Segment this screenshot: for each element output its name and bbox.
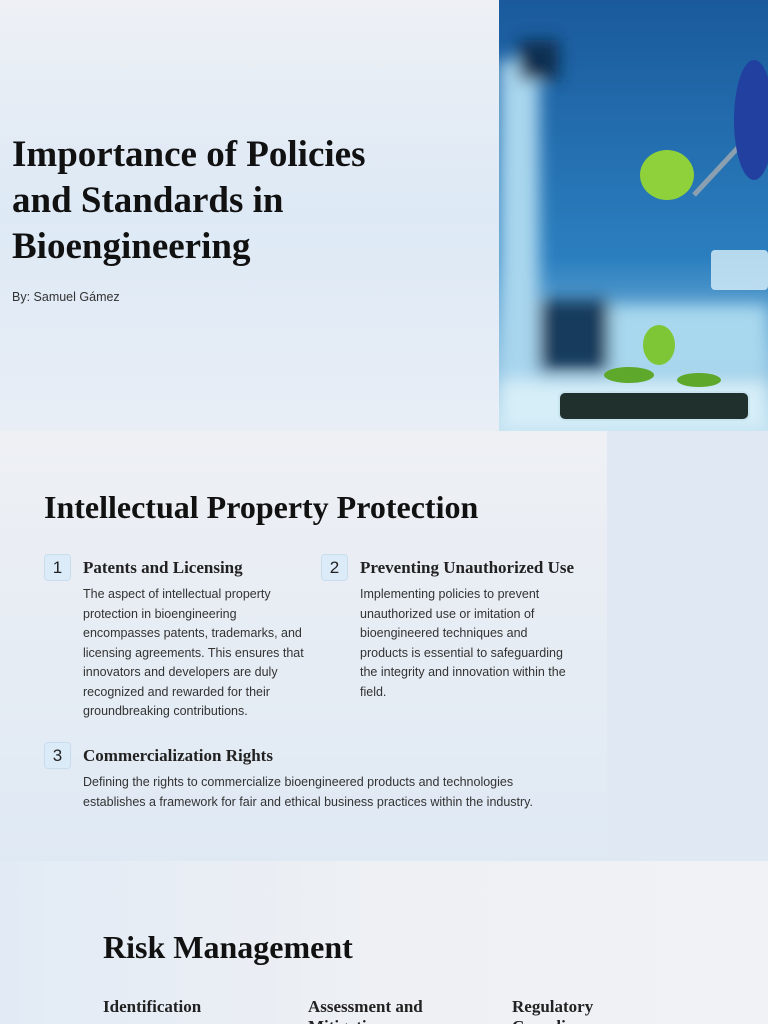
- item 1: The aspect of intellectual property protection in bioengineering encompasses patents, trademarks, and licensing agreements. This ensures that innovators and developers are duly recognized and rewarded for their groundbreaking contributions.: [83, 587, 304, 718]
- title: Importance of Policies and Standards in Bioengineering: [12, 134, 365, 267]
- photo: lab plant: [499, 0, 768, 431]
- item 1: Patents and Licensing: [83, 558, 243, 577]
- section: title: [0, 0, 768, 431]
- section: intellectual property: [0, 431, 768, 861]
- item 2: 2: [330, 558, 339, 577]
- section: risk management: [0, 861, 768, 1024]
- item 2: Preventing Unauthorized Use: [360, 558, 574, 577]
- icon: seedling dish: [643, 325, 675, 365]
- item 1: 1: [53, 558, 62, 577]
- item 3: 3: [53, 746, 62, 765]
- heading: Risk Management: [103, 929, 353, 965]
- item 3: [44, 742, 533, 808]
- icon: leaf with tweezers: [640, 150, 694, 200]
- item 2: [321, 554, 574, 698]
- item 2: Implementing policies to prevent unauthorized use or imitation of bioengineered techniques and products is essential to safeguarding the integrity and innovation within the field.: [360, 587, 566, 698]
- item 3: Commercialization Rights: [83, 746, 273, 765]
- item 1: [44, 554, 304, 718]
- byline: By: Samuel Gámez: [12, 290, 120, 304]
- subheading: identification: Identification: [103, 997, 201, 1016]
- heading: Intellectual Property Protection: [44, 489, 478, 525]
- item 3: Defining the rights to commercialize bioengineered products and technologies establishes a framework for fair and ethical business practices within the industry.: [83, 775, 533, 808]
